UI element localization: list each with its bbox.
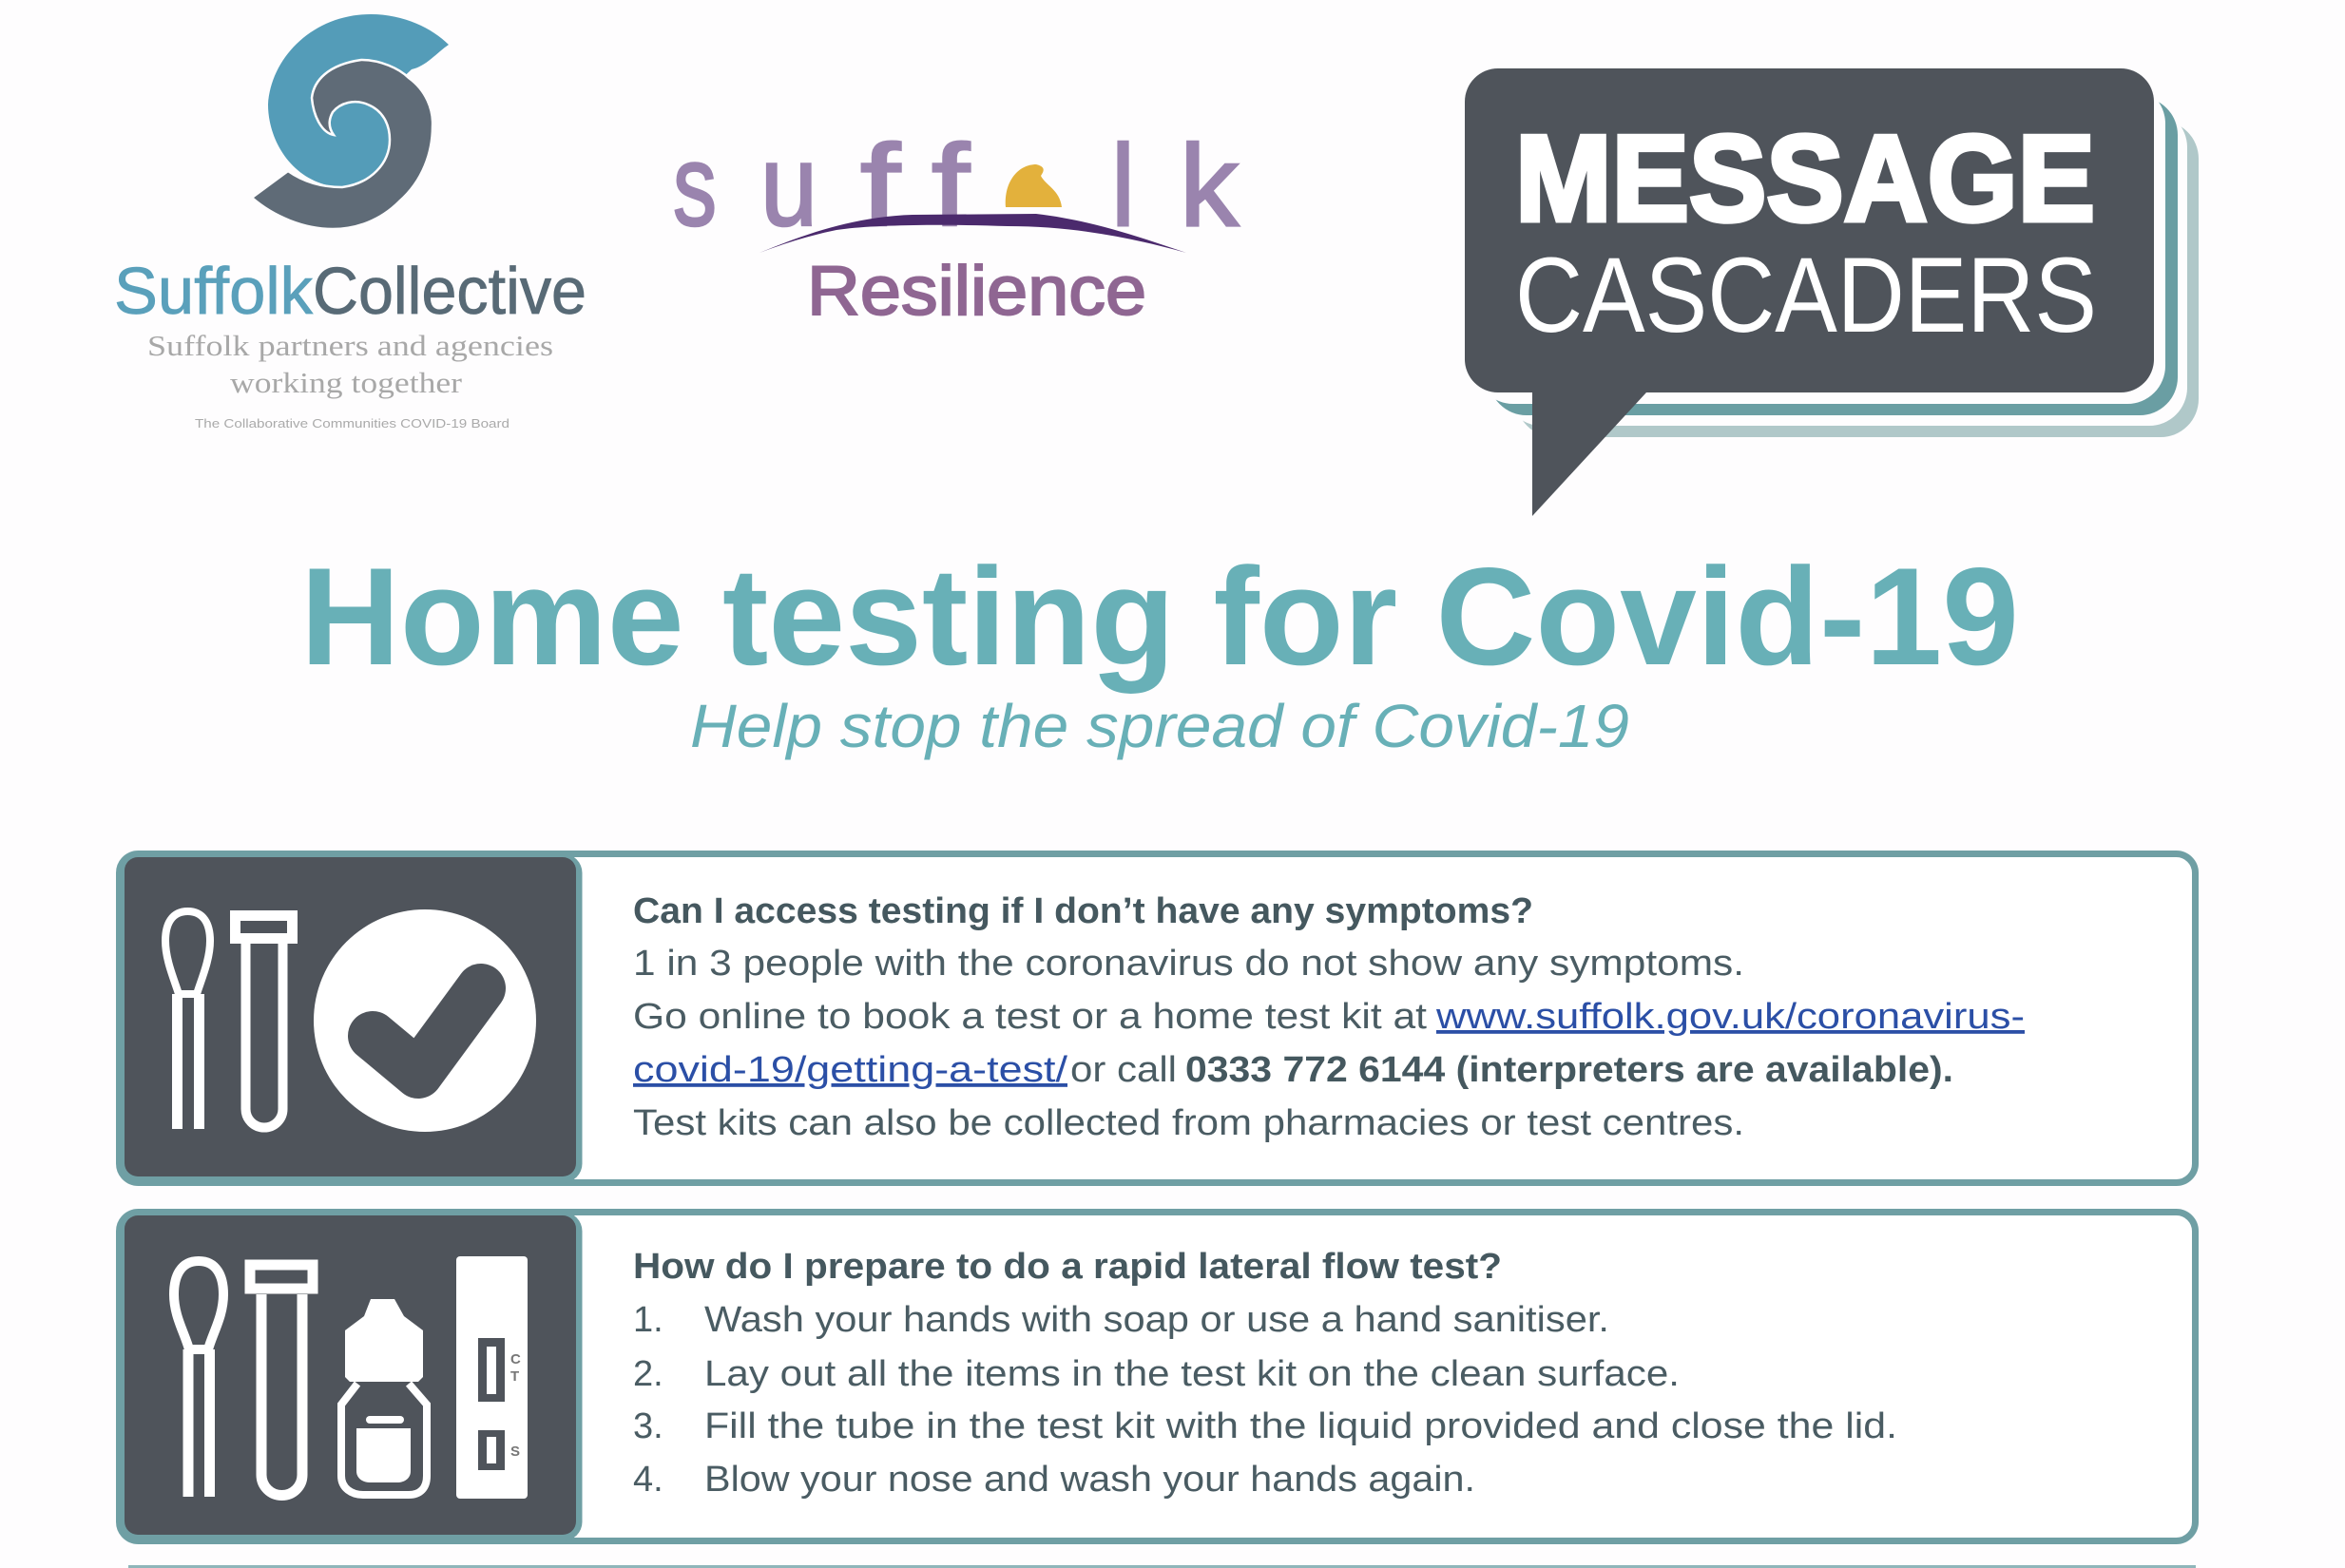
- logo letters: f: [860, 121, 901, 250]
- logo word: Resilience: Resilience: [807, 253, 1146, 330]
- panel text: [633, 891, 2025, 1143]
- panel text: 3.: [633, 1406, 663, 1446]
- title: Home testing for Covid-19: [300, 539, 2019, 694]
- icon: swab, tube, bottle and test cassette: [174, 1256, 528, 1499]
- logo wordmark: Suffolk: [114, 254, 314, 328]
- panel: prepare for test: [120, 1213, 2196, 1541]
- subtitle: Help stop the spread of Covid-19: [690, 692, 1629, 760]
- logo strapline: The Collaborative Communities COVID-19 Board: [195, 416, 509, 430]
- icon: swirl: [252, 14, 449, 229]
- logo text: MESSAGE: MESSAGE: [1515, 110, 2095, 247]
- panel: access testing: [120, 853, 2196, 1182]
- panel text: Wash your hands with soap or use a hand sanitiser.: [704, 1300, 1609, 1340]
- icon: sun: [1006, 164, 1062, 207]
- logo letters: k: [1180, 121, 1240, 250]
- panel text: 1.: [633, 1300, 663, 1340]
- panel text: 2.: [633, 1354, 663, 1394]
- panel text: [633, 1247, 1897, 1500]
- panel text: Test kits can also be collected from pharmacies or test centres.: [633, 1103, 1744, 1143]
- logo: Suffolk Collective: [114, 14, 586, 430]
- panel text: 4.: [633, 1460, 663, 1500]
- panel text: 0333 772 6144 (interpreters are available).: [1185, 1050, 1953, 1090]
- logo: Suffolk Resilience: [673, 121, 1240, 330]
- logo: Message Cascaders speech bubble: [1465, 68, 2199, 516]
- next panel top edge: [128, 1565, 2196, 1568]
- icon: horizon arc: [759, 214, 1186, 253]
- icon: swab, tube, bottle and test cassette: S: [510, 1444, 520, 1460]
- logo strapline: working together: [230, 366, 463, 399]
- logo text: CASCADERS: CASCADERS: [1515, 236, 2097, 354]
- panel text: Lay out all the items in the test kit on the clean surface.: [704, 1354, 1680, 1394]
- logo letters: f: [932, 121, 971, 250]
- panel text: Blow your nose and wash your hands again.: [704, 1460, 1475, 1500]
- logo wordmark: Collective: [313, 254, 586, 328]
- logo letters: s: [673, 121, 717, 250]
- panel text: covid-19/getting-a-test/: [633, 1050, 1068, 1090]
- panel text: How do I prepare to do a rapid lateral flow test?: [633, 1247, 1502, 1287]
- panel text: Can I access testing if I don’t have any symptoms?: [633, 891, 1533, 931]
- panel text: www.suffolk.gov.uk/coronavirus-: [1435, 997, 2025, 1037]
- panel text: or call: [1070, 1050, 1177, 1090]
- panel text: Fill the tube in the test kit with the liquid provided and close the lid.: [704, 1406, 1897, 1446]
- panel text: 1 in 3 people with the coronavirus do not show any symptoms.: [633, 944, 1744, 984]
- logo letters: l: [1111, 121, 1135, 250]
- icon: swab, tube, bottle and test cassette: C: [510, 1351, 521, 1367]
- logo strapline: Suffolk partners and agencies: [147, 329, 553, 362]
- panel text: Go online to book a test or a home test kit at: [633, 997, 1427, 1037]
- logo letters: [673, 121, 1240, 250]
- logo letters: u: [760, 121, 817, 250]
- icon: swab, tube and tick: [165, 909, 536, 1132]
- icon: swab, tube, bottle and test cassette: T: [510, 1368, 519, 1385]
- logo strapline: [147, 329, 553, 430]
